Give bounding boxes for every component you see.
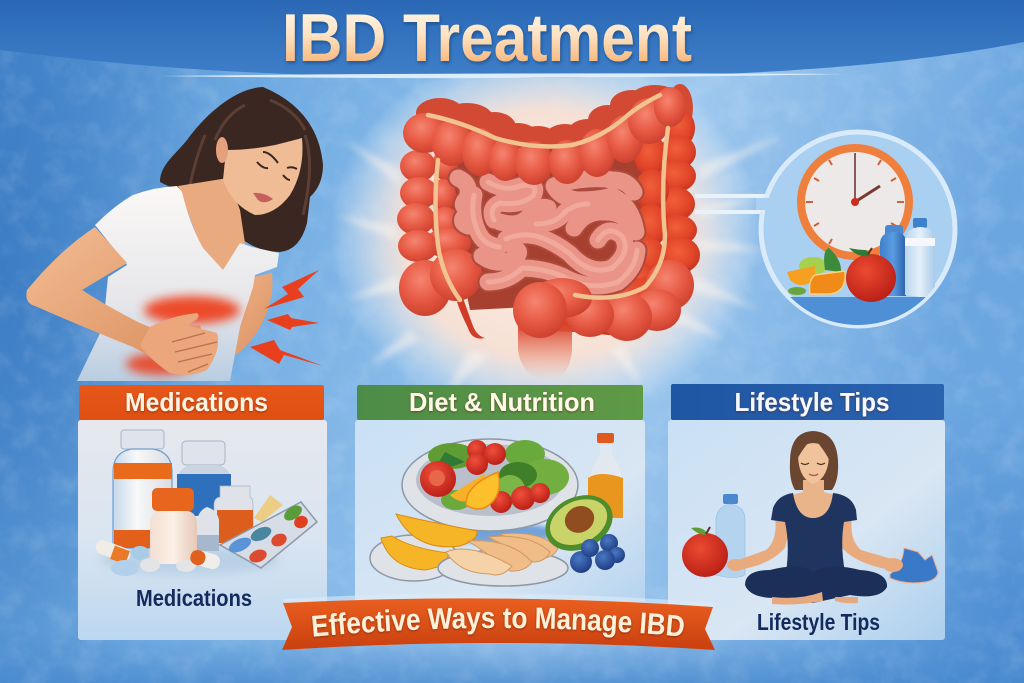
left colon: [397, 150, 471, 262]
inner cavity: [440, 130, 660, 310]
oil bottle: [588, 445, 623, 518]
chicken plate: [438, 550, 568, 586]
tomatoes: [420, 461, 456, 497]
running shoes: [890, 548, 938, 583]
far arm: [200, 273, 272, 372]
banner text: Effective Ways to Manage IBD: [311, 608, 685, 640]
panel body: [355, 420, 645, 640]
face: [798, 443, 829, 484]
small vial: [197, 507, 219, 550]
panel body: [668, 420, 945, 640]
sigmoid colon: [513, 278, 592, 338]
panel heading: Medications: [125, 387, 268, 417]
fringe: [796, 432, 830, 462]
panel: lifestyle tips: [668, 384, 945, 640]
transverse colon front row: [403, 87, 686, 185]
panel: diet and nutrition: [355, 385, 645, 640]
bubble circle: [761, 132, 955, 326]
panel heading: Lifestyle Tips: [734, 387, 890, 417]
arm across abdomen: [26, 227, 205, 368]
blister pack: [220, 502, 317, 568]
large bottle: [121, 430, 164, 449]
top band: [0, 0, 1024, 78]
lemon: [450, 473, 486, 502]
amber bottle: [214, 486, 253, 545]
lower colon: [515, 268, 691, 336]
caecum: [399, 249, 482, 316]
appendix: [457, 298, 485, 339]
top: [771, 493, 857, 572]
neck and chest: [792, 480, 835, 518]
panel heading: Diet & Nutrition: [409, 387, 595, 417]
fruit: [787, 248, 896, 302]
right colon: [621, 109, 700, 295]
front bottle: [150, 511, 197, 564]
colon back row: [416, 84, 693, 152]
panel heading bar: [79, 385, 324, 420]
banana plate: [370, 535, 458, 581]
feet: [772, 592, 858, 605]
clock: [801, 148, 909, 256]
panel: medications: [78, 385, 327, 640]
face: [223, 138, 302, 215]
food illustration: [370, 433, 625, 586]
hair back: [790, 431, 838, 490]
title divider: [160, 73, 845, 78]
loose pills: [94, 538, 132, 564]
ear: [216, 137, 228, 163]
chicken slices: [446, 533, 558, 575]
central glow and rays behind intestine: [330, 45, 785, 425]
callout connector: [695, 196, 765, 212]
taenia strips: [428, 95, 668, 300]
salad leaves: [428, 440, 569, 510]
descending to rectum: [518, 325, 572, 380]
title: IBD Treatment: [282, 0, 692, 76]
panel heading bar: [671, 384, 944, 420]
inflamed belly glow: [144, 296, 240, 324]
t-shirt: [77, 186, 279, 381]
arms: [735, 517, 792, 570]
hair: [160, 87, 323, 252]
crossed legs: [745, 566, 887, 603]
callout bubble: meal timing: [695, 132, 960, 337]
neck and chest: [178, 178, 246, 272]
meditating woman: [727, 431, 903, 605]
panel caption: Lifestyle Tips: [757, 609, 880, 635]
medicine bottles and pills: [94, 430, 317, 576]
woman in pain: [26, 87, 323, 381]
small intestine: [458, 178, 637, 286]
water bottle: [716, 494, 745, 578]
apple: [682, 527, 728, 577]
blueberries: [570, 534, 625, 573]
intestine illustration: [397, 84, 700, 380]
hands: [140, 313, 218, 375]
bottles: [880, 218, 935, 297]
bananas: [396, 514, 477, 547]
panel body: [78, 420, 327, 640]
main plate: [402, 439, 578, 531]
pain lightning bolts: [250, 270, 323, 366]
closed eyes, brows and mouth: [257, 152, 297, 180]
banner ribbon: [282, 594, 715, 650]
avocado: [536, 485, 622, 561]
panel caption: Medications: [136, 585, 252, 611]
panel heading bar: [357, 385, 643, 420]
blue bottle: [182, 441, 225, 465]
